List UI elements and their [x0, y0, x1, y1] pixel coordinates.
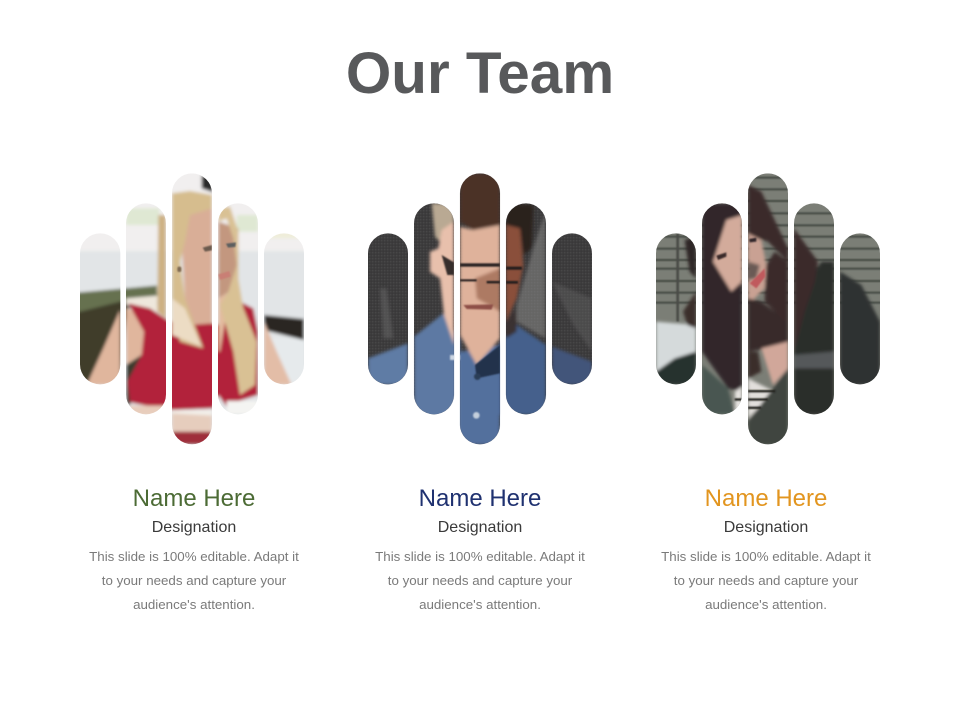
team member 3: audience's attention.	[705, 597, 827, 612]
team member 3: Designation	[724, 519, 808, 536]
team member 1: Name Here	[133, 485, 255, 512]
photo: man with glasses	[368, 173, 592, 444]
team member 2: Name Here	[419, 485, 541, 512]
team member 3: This slide is 100% editable. Adapt it	[661, 549, 871, 564]
team member 3	[661, 485, 871, 612]
photo: woman in red dress	[80, 174, 304, 444]
team member 2: This slide is 100% editable. Adapt it	[375, 549, 585, 564]
title: Our Team	[346, 41, 614, 106]
photo: smiling woman in leather jacket	[648, 165, 888, 448]
team member 1: audience's attention.	[133, 597, 255, 612]
team member 2	[375, 485, 585, 612]
team member 2: audience's attention.	[419, 597, 541, 612]
team member 3: Name Here	[705, 485, 827, 512]
team member 1: to your needs and capture your	[102, 573, 286, 588]
team member 3: to your needs and capture your	[674, 573, 858, 588]
team member 1: This slide is 100% editable. Adapt it	[89, 549, 299, 564]
team member 2: to your needs and capture your	[388, 573, 572, 588]
team member 1	[89, 485, 299, 612]
team member 2: Designation	[438, 519, 522, 536]
team member 1: Designation	[152, 519, 236, 536]
